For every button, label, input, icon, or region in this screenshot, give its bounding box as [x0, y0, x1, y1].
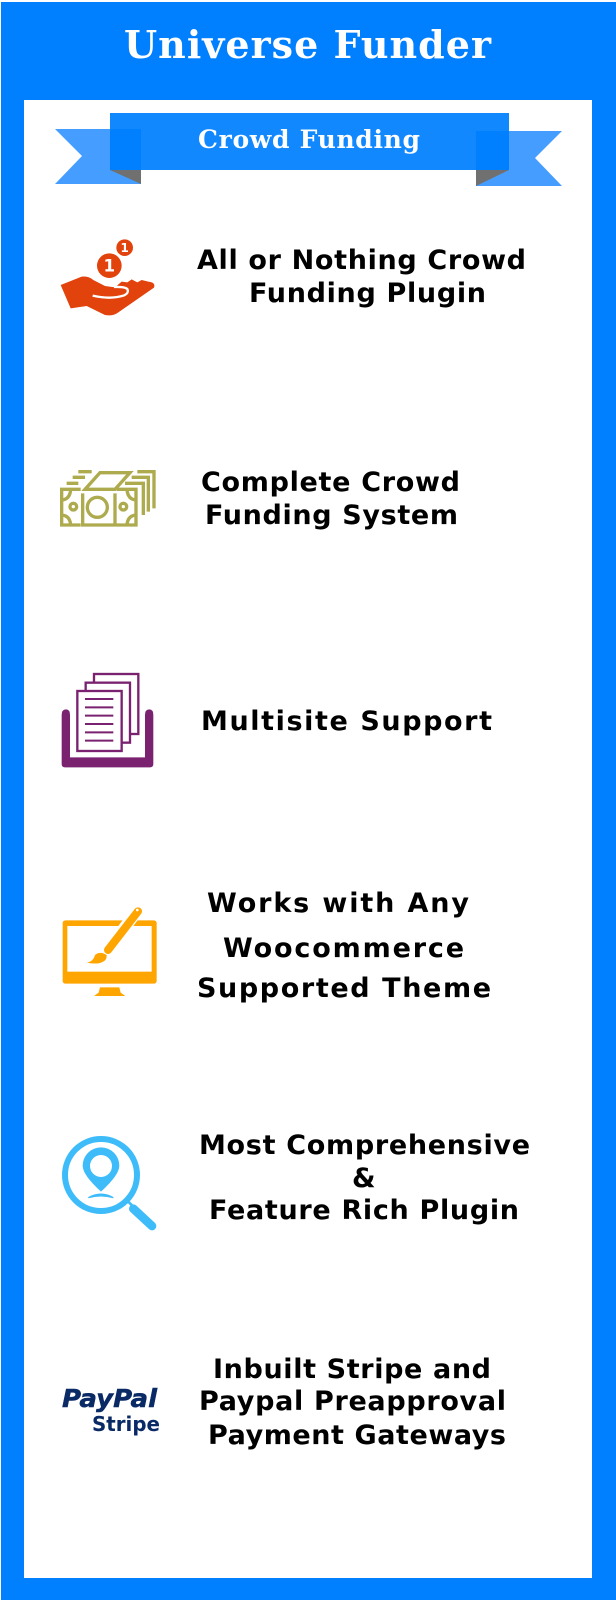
title: Universe Funder	[124, 22, 492, 67]
ribbon heading: Crowd Funding	[198, 125, 420, 154]
feature 2 text: Funding System	[205, 500, 458, 531]
icon: hand with coins: 1	[104, 257, 115, 276]
feature 1 text: All or Nothing Crowd	[197, 245, 526, 276]
icon: monitor with paintbrush	[63, 909, 157, 996]
icon: magnifier with location pin	[65, 1139, 152, 1226]
icon: documents in tray	[62, 674, 153, 767]
feature 1 text: Funding Plugin	[249, 278, 486, 309]
feature 4 text: Woocommerce	[223, 933, 464, 964]
icon: PayPal and Stripe logos: Stripe	[92, 1412, 160, 1436]
feature 2 text: Complete Crowd	[201, 467, 460, 498]
feature 5 text: Most Comprehensive	[199, 1130, 530, 1161]
ribbon banner	[55, 113, 562, 186]
icon: PayPal and Stripe logos	[62, 1384, 160, 1436]
feature 6 text: Paypal Preapproval	[199, 1386, 506, 1417]
feature 4 text	[197, 888, 491, 1004]
feature 5 text	[199, 1130, 530, 1226]
feature 5 text: &	[352, 1163, 376, 1194]
feature 3 text: Multisite Support	[201, 706, 492, 737]
feature 5 text: Feature Rich Plugin	[209, 1195, 519, 1226]
icon: hand with coins	[61, 239, 154, 315]
icon: hand with coins: 1	[120, 241, 129, 255]
feature 6 text: Inbuilt Stripe and	[213, 1354, 491, 1385]
feature 6 text: Payment Gateways	[208, 1420, 506, 1451]
icon: PayPal and Stripe logos: PayPal	[62, 1384, 157, 1413]
feature 6 text	[199, 1354, 506, 1451]
icon: banknotes	[62, 472, 154, 525]
feature 1 text	[197, 245, 526, 309]
feature 4 text: Supported Theme	[197, 973, 491, 1004]
feature 2 text	[201, 467, 460, 531]
feature 4 text: Works with Any	[207, 888, 469, 919]
